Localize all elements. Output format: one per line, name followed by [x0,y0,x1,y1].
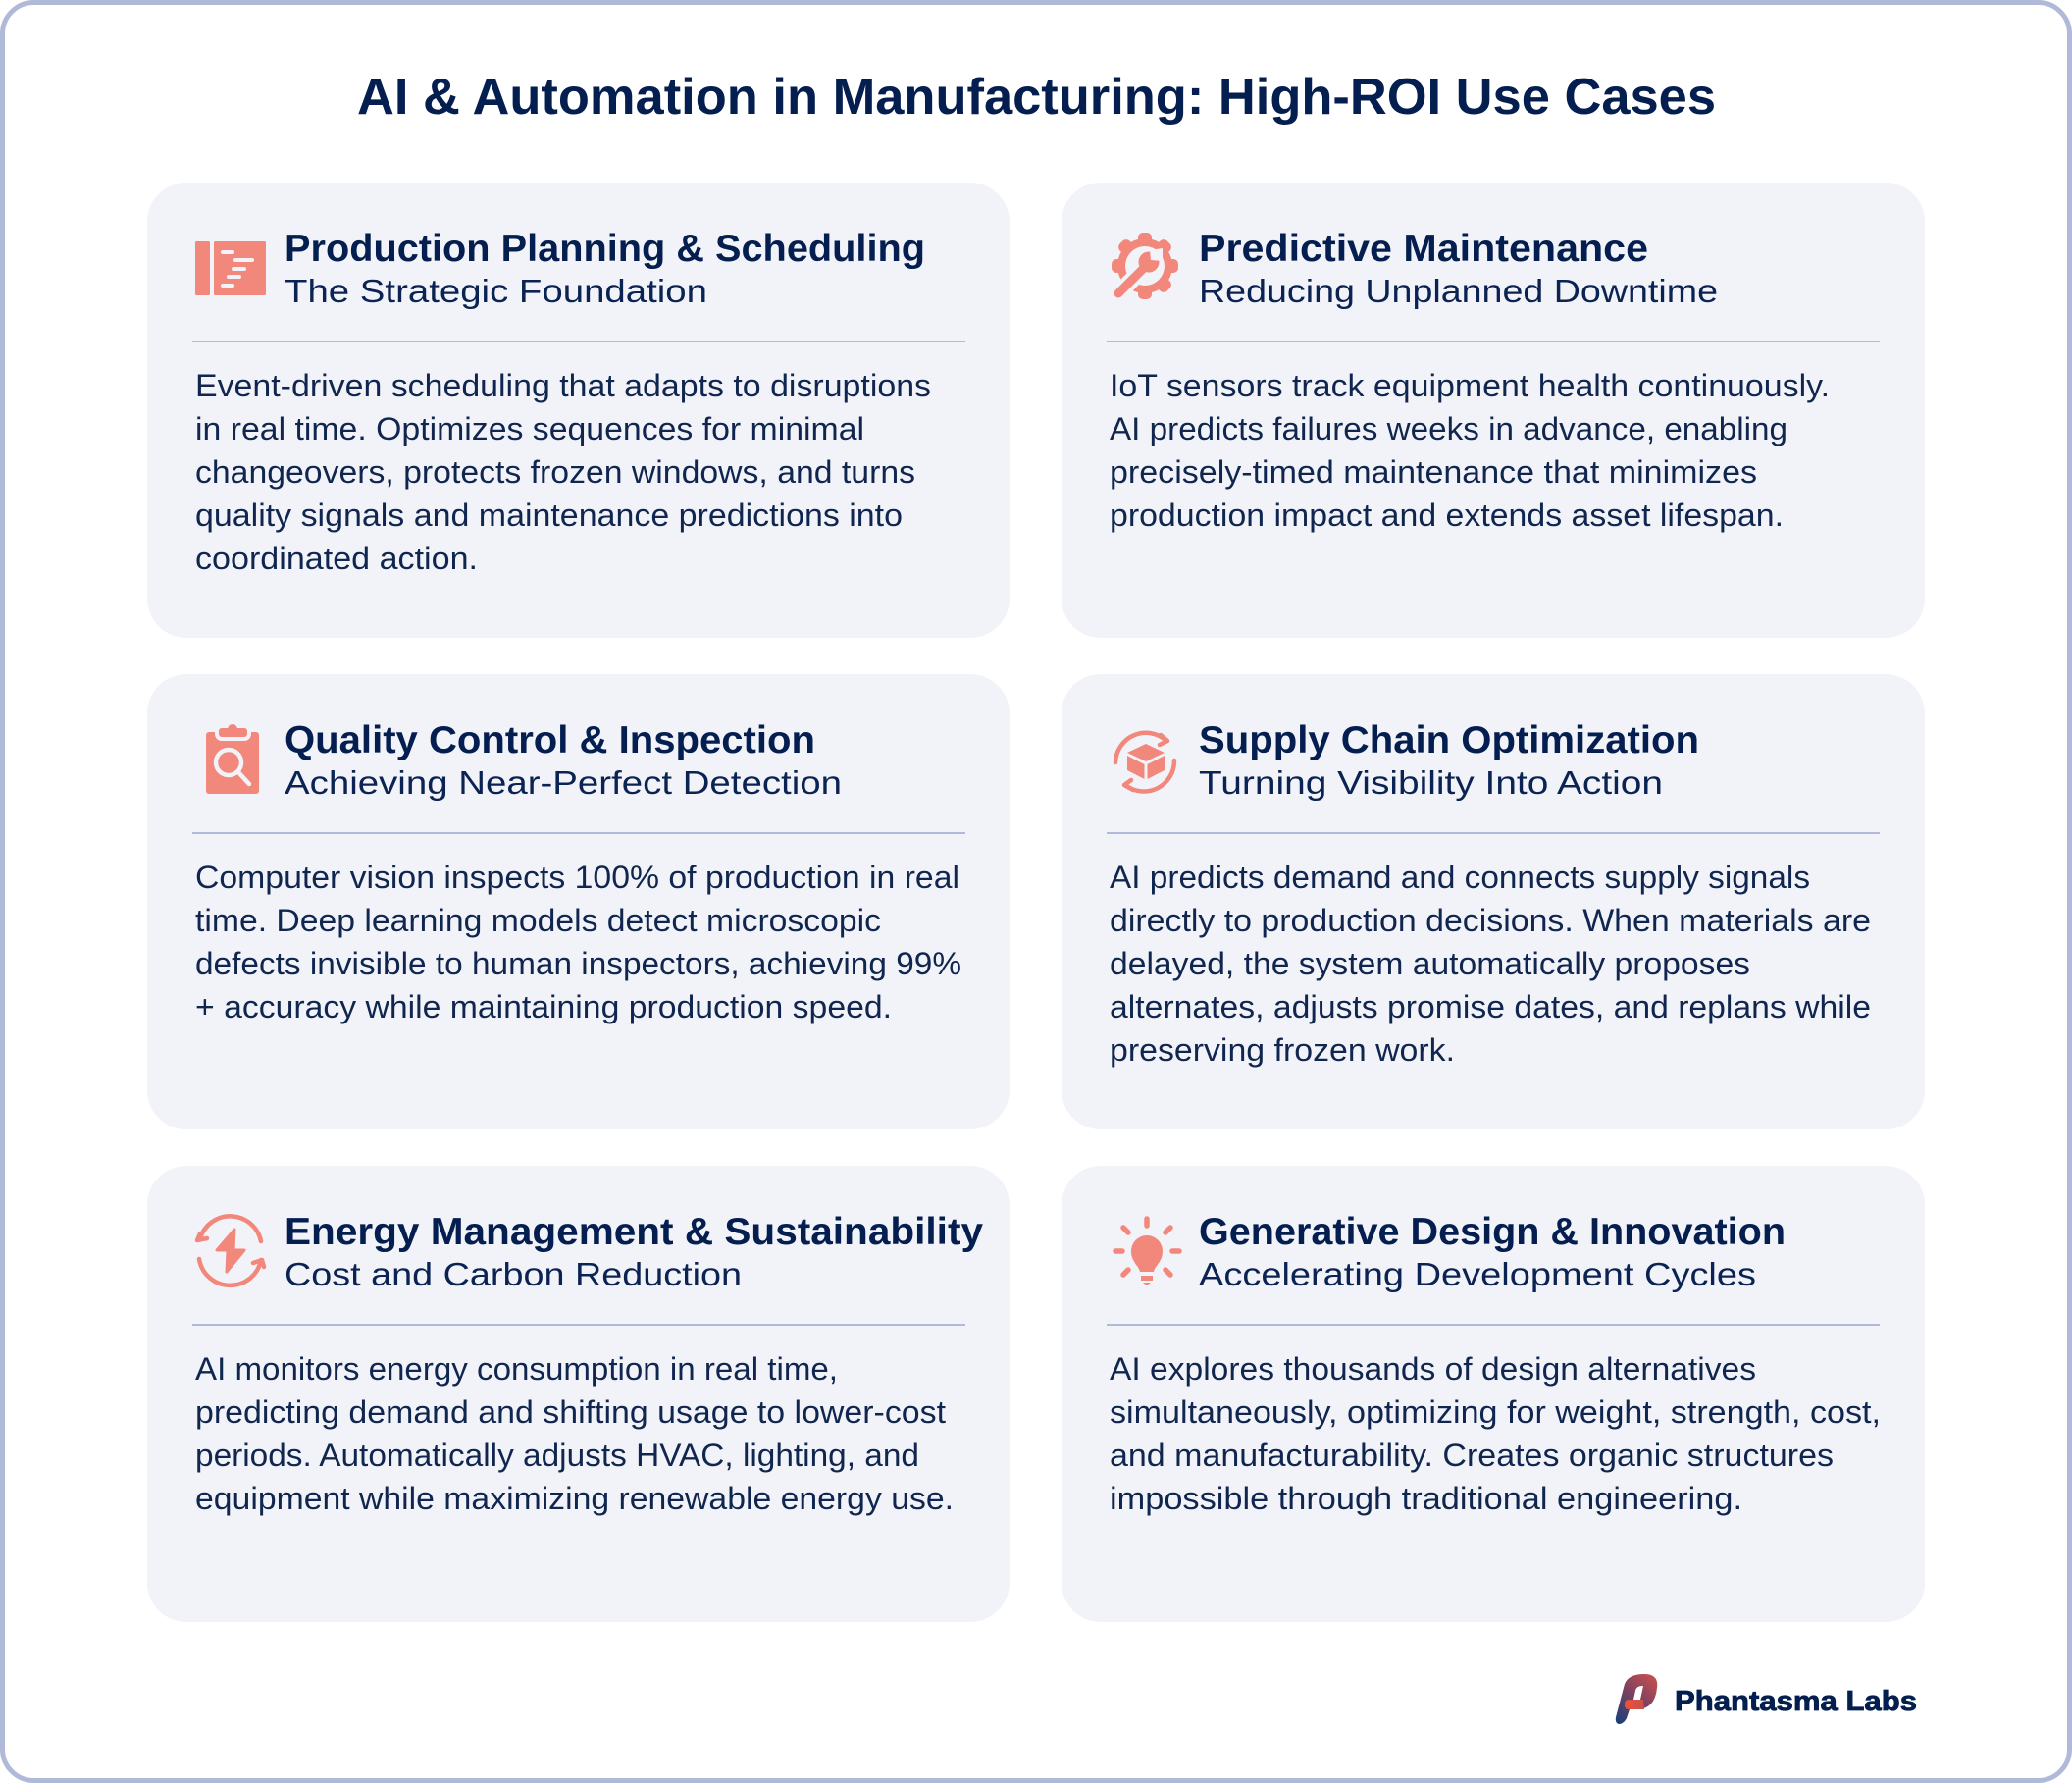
body text: time. Deep learning models detect microscopic [195,903,881,938]
subheading: Accelerating Development Cycles [1199,1256,1756,1292]
subheading: Reducing Unplanned Downtime [1199,273,1718,309]
body text: defects invisible to human inspectors, achieving 99% [195,946,961,981]
logo wordmark: Phantasma Labs [1675,1686,1917,1717]
icon: light bulb [1115,1219,1179,1285]
body text: AI explores thousands of design alternatives [1110,1351,1756,1387]
body text: AI monitors energy consumption in real time, [195,1351,838,1387]
body text: preserving frozen work. [1110,1032,1455,1068]
body text: impossible through traditional engineering. [1110,1481,1742,1516]
panel: predictive maintenance [1062,183,1925,638]
body text [1110,1351,1881,1516]
heading: Quality Control & Inspection [285,719,815,761]
heading: Production Planning & Scheduling [285,228,925,270]
title: AI & Automation in Manufacturing: High-ROI Use Cases [357,69,1716,126]
body text: + accuracy while maintaining production speed. [195,989,892,1024]
body text: quality signals and maintenance predictions into [195,498,903,533]
panel: energy management and sustainability [147,1166,1010,1622]
icon: gantt schedule [195,241,266,295]
body text: coordinated action. [195,541,478,576]
body text: production impact and extends asset lifespan. [1110,498,1784,533]
body text: directly to production decisions. When materials are [1110,903,1871,938]
heading: Generative Design & Innovation [1199,1211,1786,1253]
body text [195,860,961,1024]
body text: in real time. Optimizes sequences for minimal [195,411,864,446]
logo: Phantasma Labs [1616,1674,1917,1724]
subheading: Achieving Near-Perfect Detection [285,764,842,801]
body text [195,1351,954,1516]
subheading: Turning Visibility Into Action [1199,764,1663,801]
body text: periods. Automatically adjusts HVAC, lighting, and [195,1438,919,1473]
subheading: The Strategic Foundation [285,273,707,309]
panel: quality control and inspection [147,674,1010,1129]
body text: AI predicts demand and connects supply signals [1110,860,1810,895]
panel: production planning and scheduling [147,183,1010,638]
body text: changeovers, protects frozen windows, and turns [195,454,915,490]
body text: equipment while maximizing renewable energy use. [195,1481,954,1516]
body text: alternates, adjusts promise dates, and replans while [1110,989,1871,1024]
heading: Supply Chain Optimization [1199,719,1699,761]
panel: supply chain optimization [1062,674,1925,1129]
body text: predicting demand and shifting usage to lower-cost [195,1394,946,1430]
panel: generative design and innovation [1062,1166,1925,1622]
heading: Energy Management & Sustainability [285,1211,983,1253]
heading: Predictive Maintenance [1199,228,1648,270]
icon: box with cycle arrows [1115,733,1174,792]
icon: logo mark [1616,1674,1657,1724]
body text [1110,860,1871,1068]
icon: gear and wrench [1112,233,1178,299]
body text [195,368,931,576]
body text: precisely-timed maintenance that minimizes [1110,454,1757,490]
body text: IoT sensors track equipment health continuously. [1110,368,1830,403]
body text: delayed, the system automatically proposes [1110,946,1750,981]
body text: Event-driven scheduling that adapts to disruptions [195,368,931,403]
icon: lightning bolt with cycle arrows [197,1216,264,1285]
subheading: Cost and Carbon Reduction [285,1256,742,1292]
body text: AI predicts failures weeks in advance, enabling [1110,411,1787,446]
body text: simultaneously, optimizing for weight, strength, cost, [1110,1394,1881,1430]
body text: Computer vision inspects 100% of production in real [195,860,959,895]
body text [1110,368,1830,533]
body text: and manufacturability. Creates organic structures [1110,1438,1834,1473]
icon: clipboard with magnifier [206,724,259,794]
